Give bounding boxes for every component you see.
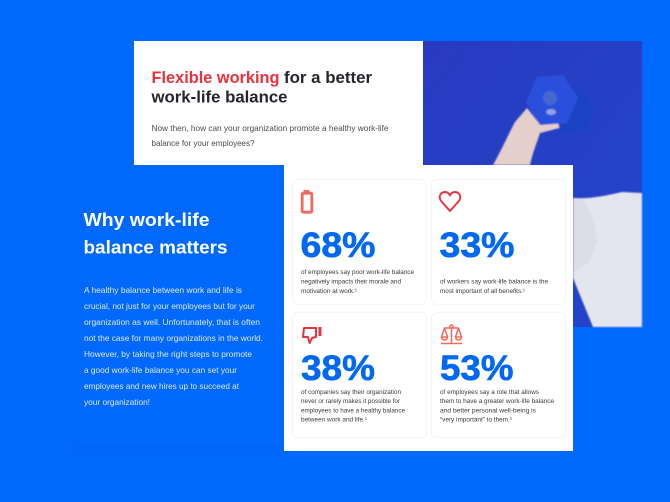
card: 53 percent (432, 312, 566, 438)
description: of employees say poor work-life balance (301, 269, 415, 276)
description: of employees say a role that allows (440, 389, 539, 396)
body text: employees and new hires up to succeed at (84, 382, 240, 391)
card: 38 percent (292, 312, 426, 438)
figure: 53%: 53% (440, 349, 514, 388)
body text: A healthy balance between work and life is (84, 286, 242, 295)
panel: intro (134, 41, 423, 165)
panel: photo of arm lifting a dumbbell (423, 41, 642, 327)
description: of companies say their organization (301, 389, 402, 396)
heading: flexible working: work-life balance (151, 88, 288, 106)
body text: your organization! (84, 398, 150, 407)
figure: 68%: 68% (300, 226, 376, 265)
icon: battery (302, 190, 312, 212)
description: motivation at work.¹ (301, 288, 357, 295)
intro text (152, 124, 389, 148)
heading: flexible working (151, 68, 372, 106)
description: never or rarely makes it possible for (301, 398, 400, 405)
description (301, 389, 406, 424)
description: “very important” to them.¹ (440, 416, 512, 424)
card: 68 percent (292, 180, 426, 304)
description: negatively impacts their morale and (301, 278, 402, 286)
icon: scales (441, 325, 462, 344)
soft panel shadow (75, 446, 285, 452)
heading: flexible working: for a better (284, 68, 372, 87)
intro text: balance for your employees? (152, 139, 255, 148)
figure: 33%: 33% (440, 226, 514, 265)
heading: why work-life balance matters: balance matters (84, 236, 228, 258)
description: them to have a greater work-life balance (440, 398, 555, 405)
description (440, 278, 549, 295)
icon: heart (440, 192, 460, 211)
body text: organization as well. Unfortunately, that is often (84, 318, 260, 327)
body text: crucial, not just for your employees but for your (84, 302, 255, 311)
card: 33 percent (432, 180, 566, 304)
description: between work and life.¹ (301, 416, 367, 424)
description: of workers say work-life balance is the (440, 278, 549, 286)
icon: thumbs down (303, 327, 322, 343)
description: most important of all benefits.¹ (440, 288, 525, 295)
body text: a good work-life balance you can set your (84, 366, 237, 375)
heading: why work-life balance matters (84, 209, 228, 258)
heading: why work-life balance matters: Why work-life (84, 209, 210, 230)
heading: flexible working: Flexible working (152, 68, 280, 87)
body text: However, by taking the right steps to promote (84, 350, 252, 359)
description: employees to have a healthy balance (301, 407, 406, 414)
body text: not the case for many organizations in the world. (84, 334, 263, 343)
figure: 38%: 38% (301, 349, 375, 388)
panel: statistics (284, 165, 573, 451)
intro text: Now then, how can your organization promote a healthy work-life (152, 124, 389, 133)
description (440, 389, 555, 424)
description (301, 269, 415, 295)
body text (84, 286, 263, 407)
description: and better personal well-being is (440, 407, 536, 414)
